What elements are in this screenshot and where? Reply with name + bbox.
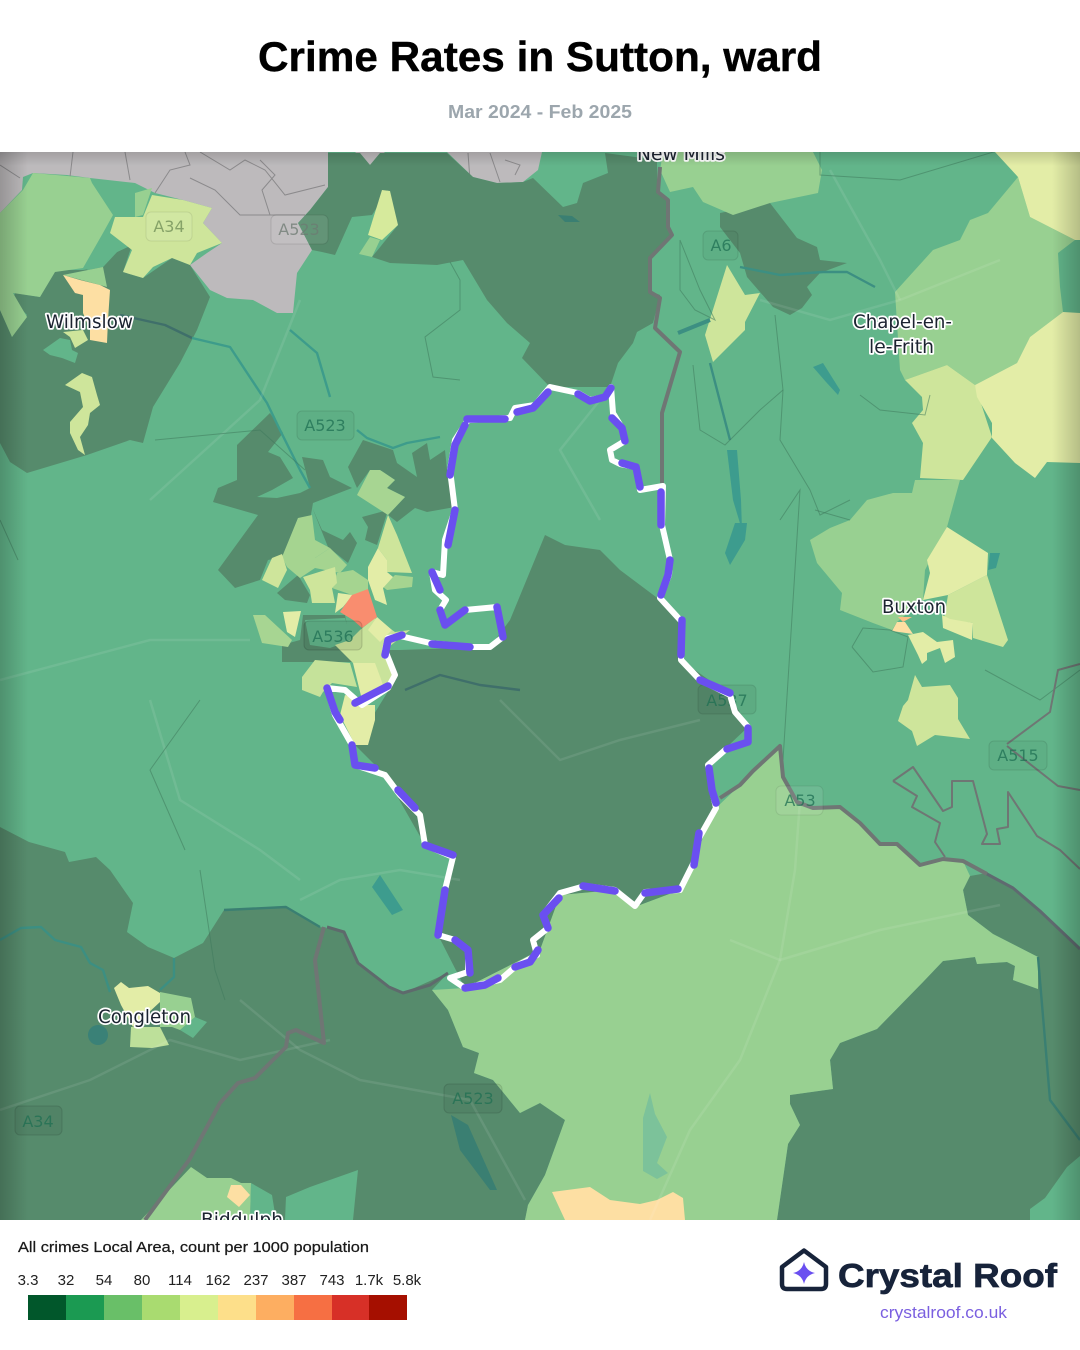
ward outline: white (327, 387, 748, 988)
road label: A523 south: A523 (452, 1089, 494, 1108)
website address: crystalroof.co.uk (880, 1303, 1008, 1322)
road label: A34 south (15, 1106, 62, 1135)
legend scale values: 743 (319, 1272, 345, 1289)
road label: A537: A537 (706, 691, 748, 710)
road label: A6 (703, 231, 738, 260)
logo: Crystal Roof (782, 1250, 1058, 1322)
place label: Congleton: Congleton (98, 1006, 191, 1028)
place label: Wilmslow: Wilmslow (46, 311, 133, 333)
map edge shading (0, 152, 1080, 1220)
faint roads (0, 170, 1000, 1220)
legend scale values: 237 (243, 1272, 269, 1289)
legend (18, 1239, 422, 1320)
legend scale values: 54 (96, 1272, 112, 1289)
thin region outlines (0, 150, 1080, 1000)
place label: Chapel-en-le-Frith (853, 311, 952, 358)
place label: New Mills: New Mills (637, 143, 725, 165)
ward outline: blue dashes (327, 388, 748, 988)
peach high-crime regions (63, 275, 913, 1220)
dark green regions (0, 153, 1080, 1220)
road label: A53 (776, 786, 823, 815)
road label: A523 north: A523 (278, 220, 320, 239)
place label: Biddulph: Biddulph (201, 1209, 283, 1231)
legend scale values: 1.7k (355, 1272, 384, 1289)
legend scale values: 32 (58, 1272, 74, 1289)
icon: house with star (782, 1250, 826, 1289)
road label: A6: A6 (710, 236, 732, 255)
road label: A536 (304, 621, 362, 650)
road label: A536: A536 (312, 627, 354, 646)
road label: A34 north (146, 212, 192, 241)
road label: A53: A53 (784, 791, 816, 810)
road label: A523 north (271, 215, 328, 244)
road label: A523 central (297, 411, 354, 440)
legend scale values (18, 1272, 422, 1289)
legend scale values: 387 (281, 1272, 307, 1289)
road label: A523 central: A523 (304, 416, 346, 435)
rivers and lakes (0, 215, 1080, 1190)
road label: A515 (989, 741, 1047, 770)
grey area without data (0, 152, 542, 313)
logo wordmark: Crystal Roof (838, 1257, 1058, 1294)
place label: Chapel-en-le-Frith: le-Frith (869, 336, 934, 358)
subtitle: date range: Mar 2024 - Feb 2025 (448, 102, 632, 122)
medium green pockets (43, 180, 358, 1220)
road label: A515: A515 (997, 746, 1039, 765)
title: Crime Rates in Sutton, ward (258, 33, 822, 80)
place label: Chapel-en-le-Frith: Chapel-en- (853, 311, 952, 333)
road label: A34 north: A34 (153, 217, 185, 236)
light green regions (0, 152, 1075, 1220)
legend scale values: 80 (134, 1272, 150, 1289)
map base: medium green areas (0, 152, 1080, 1220)
county boundary lines (145, 167, 1080, 1220)
pale yellow regions (114, 152, 1080, 1027)
place label: Buxton: Buxton (882, 596, 946, 618)
legend scale values: 5.8k (393, 1272, 422, 1289)
road label: A523 south (444, 1084, 502, 1113)
legend scale values: 114 (168, 1272, 192, 1289)
legend scale values: 162 (205, 1272, 231, 1289)
road label: A537 (698, 685, 756, 714)
road label: A34 south: A34 (22, 1112, 54, 1131)
ward boundary: Sutton (327, 387, 748, 988)
legend title: All crimes Local Area, count per 1000 population (18, 1239, 369, 1256)
legend colour bar (28, 1295, 407, 1320)
grey area internal boundaries (0, 152, 520, 215)
legend scale values: 3.3 (18, 1272, 38, 1289)
red highest-crime region (340, 589, 377, 628)
yellow-green regions (63, 195, 1008, 1048)
